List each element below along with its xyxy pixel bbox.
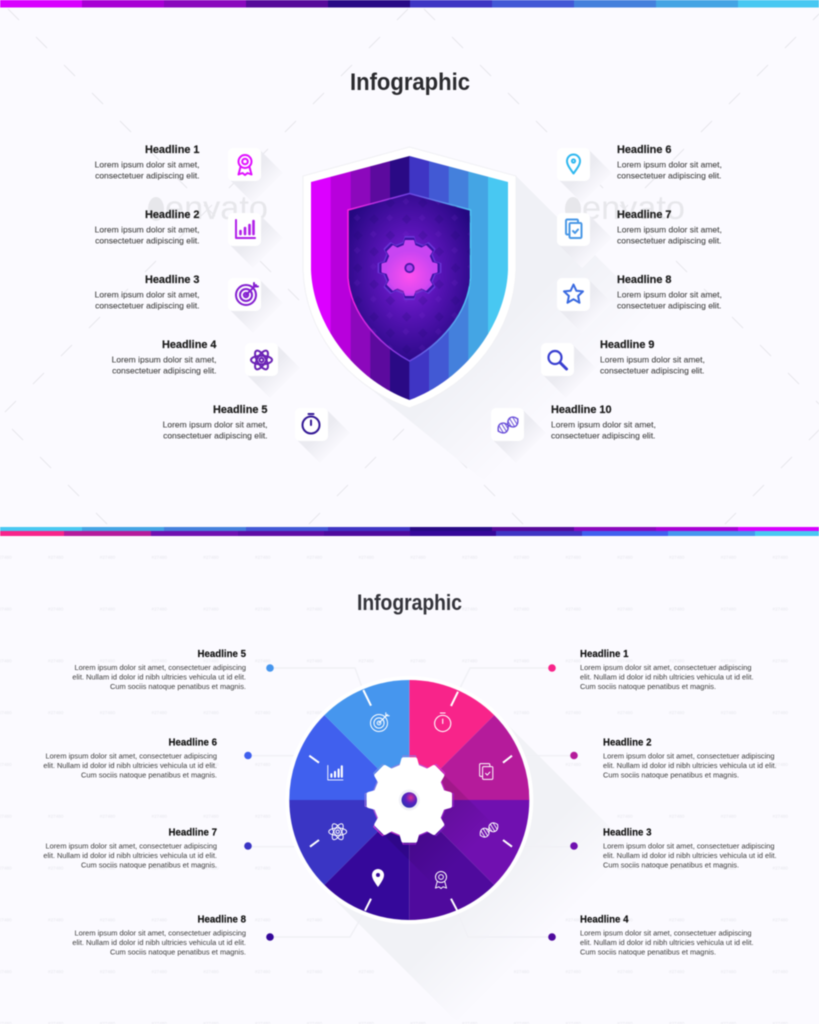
label: Headline 2: elit. Nullam id dolor id nibh ultricies vehicula ut id elit. — [603, 761, 777, 770]
label: Headline 1: Cum sociis natoque penatibus et magnis. — [580, 682, 716, 691]
label: Headline 5: Cum sociis natoque penatibus et magnis. — [110, 682, 246, 691]
label: Headline 5 — [72, 649, 274, 691]
label: Headline 3: Cum sociis natoque penatibus et magnis. — [603, 860, 739, 870]
item: Headline 6: consectetuer adipiscing elit. — [617, 170, 721, 180]
item: Headline 2: Lorem ipsum dolor sit amet, — [95, 225, 200, 235]
white spokes — [309, 690, 512, 911]
item: Headline 9: Lorem ipsum dolor sit amet, — [600, 355, 705, 365]
central gear — [365, 756, 453, 844]
label: Headline 3 — [570, 828, 777, 870]
item: Headline 9: Headline 9 — [600, 339, 654, 351]
item: Headline 4 — [112, 339, 300, 398]
wheel icons — [328, 713, 500, 888]
label: Headline 3: Lorem ipsum dolor sit amet, consectetuer adipiscing — [603, 842, 775, 850]
item: Headline 3: Lorem ipsum dolor sit amet, — [95, 290, 200, 300]
wheel white rim — [285, 676, 533, 924]
label: Headline 1: elit. Nullam id dolor id nibh ultricies vehicula ut id elit. — [580, 672, 754, 682]
label: Headline 3: elit. Nullam id dolor id nibh ultricies vehicula ut id elit. — [603, 851, 777, 860]
label: Headline 6: elit. Nullam id dolor id nibh ultricies vehicula ut id elit. — [43, 761, 217, 770]
label: Headline 2: Cum sociis natoque penatibus et magnis. — [603, 770, 739, 780]
label: Headline 2: Headline 2 — [603, 738, 651, 748]
gear long shadow on sectors — [385, 776, 479, 868]
label: Headline 6: Headline 6 — [169, 738, 218, 748]
sector 5 indigo — [324, 800, 409, 920]
label: Headline 8: Cum sociis natoque penatibus et magnis. — [110, 948, 246, 956]
item: Headline 6 — [557, 144, 722, 203]
item: Headline 8: Lorem ipsum dolor sit amet, — [617, 290, 722, 300]
wheel long shadow — [322, 713, 632, 1023]
item: Headline 7: Lorem ipsum dolor sit amet, — [617, 225, 722, 235]
label: Headline 8: elit. Nullam id dolor id nibh ultricies vehicula ut id elit. — [72, 938, 246, 947]
label: Headline 7 — [43, 828, 252, 870]
label: Headline 4 — [548, 914, 754, 956]
shield graphic — [303, 147, 516, 408]
item: Headline 8: consectetuer adipiscing elit. — [617, 300, 721, 310]
watermark: envato right: envato — [582, 189, 685, 226]
shield gear — [378, 237, 441, 299]
item: Headline 2: consectetuer adipiscing elit. — [95, 236, 200, 246]
item: Headline 10: consectetuer adipiscing elit. — [551, 430, 655, 440]
label: Headline 8: Lorem ipsum dolor sit amet, consectetuer adipiscing — [74, 928, 246, 938]
item: Headline 6: Lorem ipsum dolor sit amet, — [617, 160, 722, 170]
item: Headline 1: consectetuer adipiscing elit. — [95, 170, 200, 180]
wheel chart — [285, 676, 533, 924]
item: Headline 3: Headline 3 — [145, 274, 200, 286]
inner shield — [348, 194, 470, 361]
label: Headline 6 — [43, 738, 252, 780]
item: Headline 5: Lorem ipsum dolor sit amet, — [163, 420, 268, 430]
label: Headline 8: Headline 8 — [198, 914, 247, 926]
item: Headline 10 — [491, 404, 656, 463]
sector 2 magenta — [409, 715, 529, 800]
item: Headline 5: consectetuer adipiscing elit. — [163, 430, 268, 440]
shield white border — [303, 147, 516, 408]
label: Headline 4: Headline 4 — [580, 914, 629, 926]
title: lower: Infographic — [357, 590, 462, 615]
shield colour stripes — [310, 150, 509, 405]
item: Headline 7: consectetuer adipiscing elit. — [617, 236, 721, 246]
item: Headline 8: Headline 8 — [617, 274, 671, 286]
item: Headline 10: Headline 10 — [551, 404, 612, 416]
sector 3 violet — [409, 800, 529, 885]
item: Headline 4: Lorem ipsum dolor sit amet, — [112, 355, 216, 365]
gear hub — [402, 792, 417, 808]
label: Headline 1 — [548, 649, 754, 691]
label: Headline 5: Headline 5 — [198, 649, 247, 660]
label: Headline 6: Lorem ipsum dolor sit amet, consectetuer adipiscing — [45, 752, 217, 760]
label: Headline 7: elit. Nullam id dolor id nibh ultricies vehicula ut id elit. — [43, 851, 217, 860]
item: Headline 9 — [541, 339, 705, 398]
label: Headline 4: elit. Nullam id dolor id nibh ultricies vehicula ut id elit. — [580, 938, 754, 947]
sector 7 blue — [289, 715, 409, 800]
label: Headline 1: Headline 1 — [580, 649, 629, 660]
label: Headline 4: Lorem ipsum dolor sit amet, consectetuer adipiscing — [580, 928, 752, 938]
item: Headline 2: Headline 2 — [145, 209, 200, 221]
item: Headline 4: consectetuer adipiscing elit. — [112, 366, 216, 376]
item: Headline 4: Headline 4 — [162, 339, 216, 351]
item: Headline 3 — [95, 274, 283, 333]
sector 6 blue-violet — [289, 800, 409, 885]
label: Headline 2: Lorem ipsum dolor sit amet, consectetuer adipiscing — [603, 752, 775, 760]
item: Headline 3: consectetuer adipiscing elit. — [95, 300, 200, 310]
item: Headline 1 — [95, 144, 283, 203]
sector 8 sky — [324, 680, 409, 800]
item: Headline 1: Headline 1 — [145, 144, 200, 156]
label: Headline 7: Lorem ipsum dolor sit amet, consectetuer adipiscing — [45, 842, 217, 850]
label: Headline 3: Headline 3 — [603, 828, 652, 838]
label: Headline 5: elit. Nullam id dolor id nibh ultricies vehicula ut id elit. — [72, 672, 246, 682]
label: Headline 5: Lorem ipsum dolor sit amet, consectetuer adipiscing — [74, 663, 246, 672]
sector 4 purple — [409, 800, 494, 920]
label: Headline 8 — [72, 914, 274, 956]
sector 1 pink — [409, 680, 494, 800]
top colour band — [0, 0, 819, 8]
label: Headline 4: Cum sociis natoque penatibus et magnis. — [580, 948, 716, 956]
label: Headline 1: Lorem ipsum dolor sit amet, consectetuer adipiscing — [580, 663, 752, 672]
shield long shadow — [350, 176, 676, 502]
item: Headline 10: Lorem ipsum dolor sit amet, — [551, 420, 656, 430]
connector lines — [252, 668, 570, 937]
label: Headline 6: Cum sociis natoque penatibus et magnis. — [81, 770, 217, 780]
item: Headline 6: Headline 6 — [617, 144, 671, 156]
item: Headline 8 — [557, 274, 722, 333]
item: Headline 7 — [557, 209, 722, 268]
label: Headline 7: Cum sociis natoque penatibus et magnis. — [81, 860, 217, 870]
item: Headline 5 — [163, 404, 350, 463]
item: Headline 1: Lorem ipsum dolor sit amet, — [95, 160, 200, 170]
divider colour band — [0, 527, 819, 536]
title: upper: Infographic — [350, 69, 470, 96]
watermark: envato left: envato — [165, 189, 268, 226]
inner shield diamond texture — [348, 194, 470, 361]
item: Headline 7: Headline 7 — [617, 209, 671, 221]
label: Headline 2 — [570, 738, 777, 780]
item: Headline 5: Headline 5 — [213, 404, 268, 416]
label: Headline 7: Headline 7 — [169, 828, 217, 838]
item: Headline 2 — [95, 209, 283, 268]
item: Headline 9: consectetuer adipiscing elit. — [600, 366, 704, 376]
